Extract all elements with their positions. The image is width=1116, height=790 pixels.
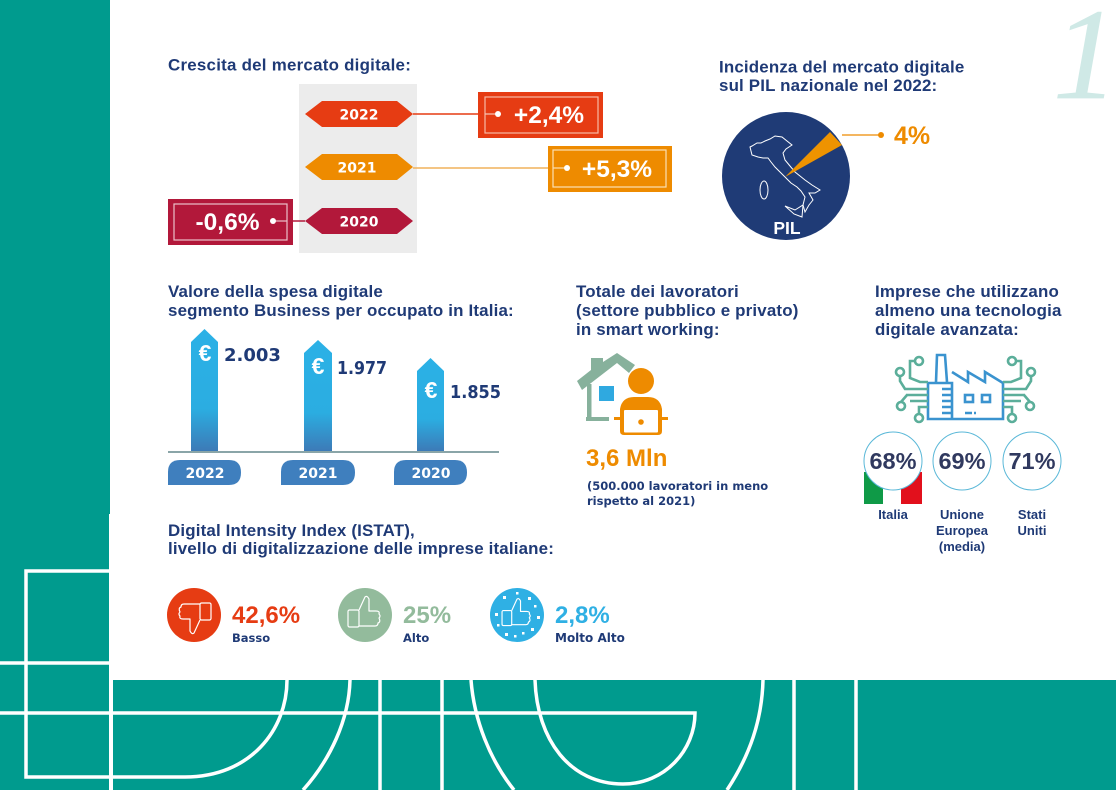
icon: worker at home with laptop — [577, 353, 668, 435]
heading: Digital Intensity Index: Digital Intensity Index (ISTAT), — [168, 521, 415, 540]
stat: Molto Alto 2,8%: Molto Alto — [555, 631, 625, 645]
year pill 2022: 2022 — [186, 466, 224, 482]
icon: Italy outline — [750, 136, 820, 217]
note: fewer workers: rispetto al 2021) — [587, 494, 695, 508]
stat: Alto 25% — [338, 588, 451, 645]
value box +2,4%: +2,4% — [514, 102, 584, 129]
stat: Italia 68% — [864, 432, 922, 522]
chart: market growth by year — [168, 84, 672, 253]
tag 2020 — [305, 208, 413, 234]
bar 2020: € — [425, 377, 438, 403]
heading: smart working: Totale dei lavoratori — [576, 282, 739, 301]
bar 2022 — [191, 329, 281, 452]
connector 2022 — [413, 113, 498, 115]
year pill 2021 — [281, 460, 355, 485]
heading: market growth: Crescita del mercato digitale: — [168, 56, 411, 74]
tag 2022 — [305, 101, 413, 127]
callout: 4%: 4% — [894, 122, 930, 150]
stat: Basso 42,6%: 42,6% — [232, 602, 300, 629]
stat: Basso 42,6% — [167, 588, 300, 645]
year pill 2020: 2020 — [412, 466, 451, 482]
stat: Unione Europea 69%: 69% — [938, 448, 986, 474]
value box +5,3% — [548, 146, 672, 192]
heading: digital spend: segmento Business per occupato in Italia: — [168, 301, 514, 320]
stat: Alto 25%: Alto — [403, 631, 429, 645]
stat: Unione Europea 69% — [933, 432, 991, 554]
year pill 2021: 2021 — [299, 466, 337, 482]
stat: Stati Uniti 71%: 71% — [1008, 448, 1056, 474]
year pill 2022 — [168, 460, 241, 485]
stat: Basso 42,6%: Basso — [232, 631, 270, 645]
chart: PIL pie with Italy map: PIL — [773, 218, 801, 238]
stat: Stati Uniti 71%: Uniti — [1018, 523, 1046, 538]
stat: Italia 68%: 68% — [869, 448, 917, 474]
connector 2021 — [413, 167, 567, 169]
stat: Unione Europea 69%: Europea — [936, 523, 989, 538]
icon: thumb up — [348, 596, 380, 627]
bar 2021 — [304, 340, 387, 452]
bar 2022: 2.003 — [224, 345, 281, 366]
heading: GDP share: Incidenza del mercato digitale — [719, 58, 964, 76]
value box -0,6%: -0,6% — [195, 209, 260, 236]
bar 2021: € — [312, 353, 325, 379]
stat: Alto 25%: 25% — [403, 602, 451, 629]
connector 2020 — [293, 220, 305, 222]
bar 2020: 1.855 — [450, 382, 501, 403]
bar 2021: 1.977 — [337, 358, 387, 379]
heading: GDP share: sul PIL nazionale nel 2022: — [719, 76, 937, 95]
stat: Unione Europea 69%: (media) — [939, 539, 985, 554]
year pill 2020 — [394, 460, 467, 485]
heading: Digital Intensity Index: livello di digitalizzazione delle imprese italiane: — [168, 539, 554, 558]
icon: thumb up with sparkles — [495, 592, 540, 638]
bar 2022: € — [199, 340, 212, 366]
chart: PIL pie with Italy map — [722, 112, 850, 240]
heading: advanced technology: Imprese che utilizzano — [875, 282, 1059, 301]
heading: advanced technology: almeno una tecnologia — [875, 301, 1062, 320]
heading: smart working: in smart working: — [576, 320, 720, 339]
stat: Stati Uniti 71%: Stati — [1018, 507, 1046, 522]
value box -0,6% — [168, 199, 293, 245]
value box +2,4% — [478, 92, 603, 138]
icon: thumb down — [179, 603, 211, 634]
stat: 3,6 Mln: 3,6 Mln — [586, 445, 667, 472]
stat: Stati Uniti 71% — [1003, 432, 1061, 538]
tag 2021: 2021 — [338, 160, 376, 176]
callout: 4% — [842, 122, 930, 150]
chart: spend per employee — [168, 329, 501, 485]
stat: Molto Alto 2,8%: 2,8% — [555, 602, 610, 629]
stat: Molto Alto 2,8% — [490, 588, 625, 645]
tag 2021 — [305, 154, 413, 180]
bar 2020 — [417, 358, 501, 452]
tag 2020: 2020 — [340, 214, 379, 230]
icon: digital factory — [896, 355, 1035, 422]
value box +5,3%: +5,3% — [582, 156, 652, 183]
note: fewer workers: (500.000 lavoratori in meno — [587, 479, 768, 493]
heading: digital spend: Valore della spesa digitale — [168, 282, 383, 301]
stat: Italia 68%: Italia — [878, 507, 909, 522]
heading: advanced technology: digitale avanzata: — [875, 320, 1019, 339]
stat: Unione Europea 69%: Unione — [940, 507, 984, 522]
heading: smart working: (settore pubblico e privato) — [576, 301, 798, 320]
tag 2022: 2022 — [340, 108, 378, 124]
